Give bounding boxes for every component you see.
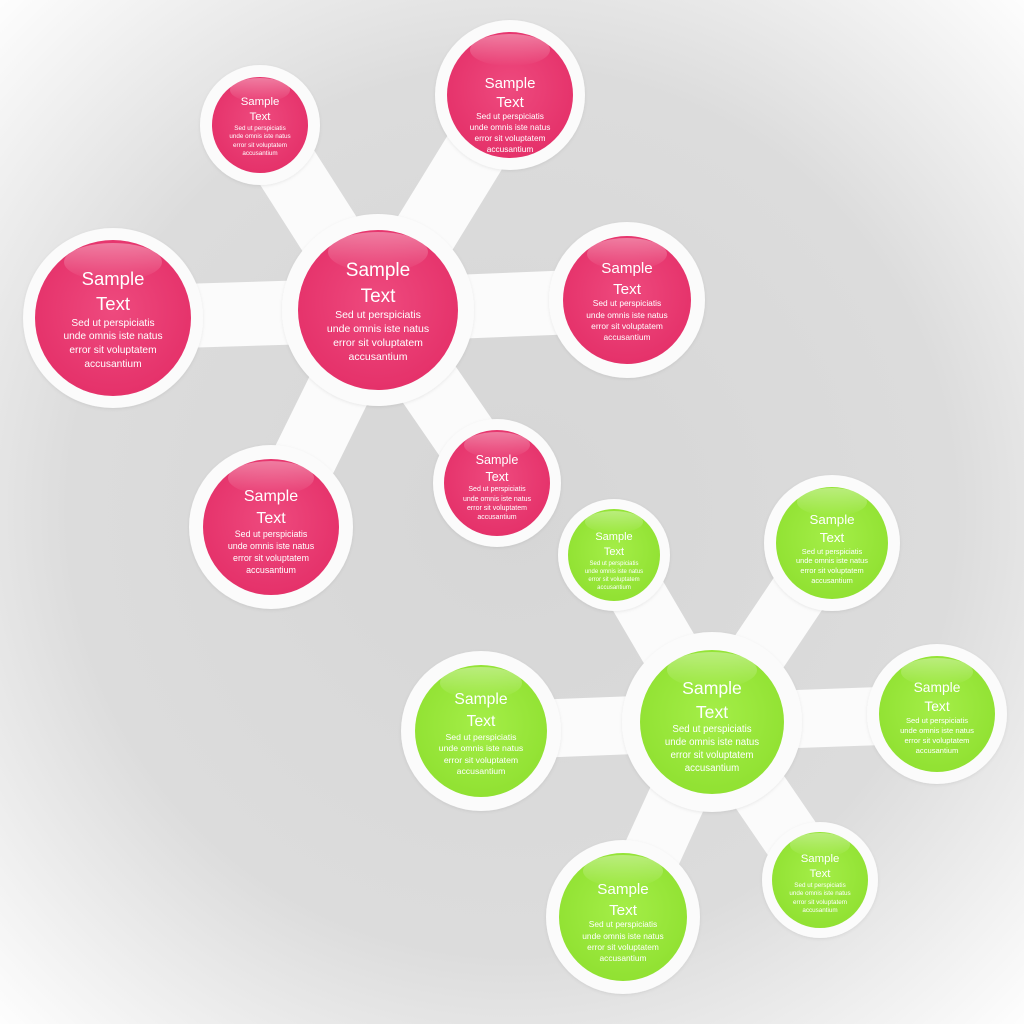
green node: right: Sample [914,680,961,695]
green node: top-right [776,487,888,599]
green node: top-right: Sed ut perspiciatis [802,547,862,556]
green node: top-right: error sit voluptatem [800,566,864,575]
pink node: center: Sed ut perspiciatis [335,309,421,321]
green node: center: Text [696,702,728,722]
pink rings [23,20,705,609]
green node: top-right: unde omnis iste natus [796,556,868,565]
pink node: bottom-right: error sit voluptatem [467,505,527,512]
green node: top-left: error sit voluptatem [588,577,640,583]
pink node: center: Sample [346,260,410,281]
green node: right [879,656,995,772]
green node: left: Text [467,713,496,730]
green node: bottom-right: Sample [801,853,839,865]
pink node: top: Sample [485,75,535,92]
green node: bottom-left [559,853,687,981]
pink node: top: Sed ut perspiciatis [476,111,544,121]
pink node: bottom-left: Sed ut perspiciatis [235,529,308,539]
green rings [401,475,1007,994]
pink node: top-left: Sed ut perspiciatis [234,125,286,132]
green node: bottom-right: unde omnis iste natus [789,890,851,897]
pink node: left: error sit voluptatem [69,345,157,356]
pink node: right: Text [613,281,642,298]
green node: right: error sit voluptatem [904,736,970,745]
green node: center: unde omnis iste natus [665,737,759,748]
green node: bottom-right: Sed ut perspiciatis [794,882,846,889]
pink node: center: unde omnis iste natus [327,323,429,335]
pink node: right [563,236,691,364]
green node: right: Text [924,699,950,714]
green network [401,475,1007,994]
green node: left: error sit voluptatem [444,755,518,765]
green node: center: error sit voluptatem [671,750,753,761]
green node: bottom-right: Text [810,868,831,880]
pink network [23,20,705,609]
green node: left: unde omnis iste natus [439,743,524,753]
green node: center: Sed ut perspiciatis [672,724,752,735]
pink node: bottom-left: unde omnis iste natus [228,541,315,551]
pink node: bottom-right [444,430,550,536]
green node: left: accusantium [457,766,505,776]
green connectors [481,543,937,917]
pink node: bottom-right: Sed ut perspiciatis [468,486,526,493]
pink node: top-left: error sit voluptatem [233,142,287,149]
green node: top-left: Text [604,546,624,558]
pink node: left: Sample [82,268,144,289]
pink node: bottom-right: Text [485,470,509,484]
green node: right: accusantium [916,746,958,755]
green node: bottom-right: accusantium [802,907,838,914]
pink node: left: Text [96,293,130,314]
green node: left: Sample [454,691,508,708]
pink node: bottom-left: Text [256,510,286,527]
green node: top-right: Sample [809,512,855,527]
pink node: right: Sed ut perspiciatis [593,298,661,308]
green node: right: unde omnis iste natus [900,726,974,735]
pink node: left: Sed ut perspiciatis [71,318,155,329]
pink node: bottom-left: error sit voluptatem [233,553,309,563]
pink node: bottom-left: accusantium [246,565,296,575]
pink node: left: accusantium [84,359,142,370]
pink node: right: accusantium [603,332,651,342]
green node: bottom-left: Sample [597,881,649,898]
pink node: left [35,240,191,396]
pink node: top: accusantium [487,144,533,154]
pink node: top: error sit voluptatem [474,133,546,143]
pink node: right: Sample [601,260,653,277]
pink node: bottom-right: Sample [476,453,518,467]
pink node: bottom-left: Sample [244,488,298,505]
green node: top-right: Text [820,530,844,545]
green node: top-left [568,509,660,601]
green node: center: accusantium [685,763,739,774]
pink node: top [447,32,573,158]
pink connectors [113,95,627,527]
green node: right: Sed ut perspiciatis [906,716,968,725]
pink node: top-left: Sample [241,96,279,108]
pink node: top-left: accusantium [242,150,278,157]
green node: bottom-right: error sit voluptatem [793,899,847,906]
green node: bottom-left: Text [609,902,638,919]
green node: top-left: accusantium [597,585,631,591]
pink node: right: error sit voluptatem [591,321,663,331]
green node: top-left: unde omnis iste natus [585,569,643,575]
green node: top-right: accusantium [811,576,853,585]
pink node: top-left: Text [250,111,271,123]
pink node: bottom-right: accusantium [477,514,517,521]
green node: left [415,665,547,797]
green node: bottom-left: accusantium [599,953,647,963]
green node: bottom-right [772,832,868,928]
green node: top-left: Sed ut perspiciatis [589,561,639,567]
pink node: left: unde omnis iste natus [63,331,163,342]
pink node: bottom-left [203,459,339,595]
green node: left: Sed ut perspiciatis [446,732,517,742]
green node: bottom-left: Sed ut perspiciatis [589,919,657,929]
pink node: right: unde omnis iste natus [586,310,668,320]
green node: center: Sample [682,678,742,698]
green node: center [640,650,784,794]
pink node: center [298,230,458,390]
pink node: center: error sit voluptatem [333,337,423,349]
pink node: top-left: unde omnis iste natus [229,133,291,140]
pink node: center: Text [361,286,396,307]
pink node: top: unde omnis iste natus [470,122,550,132]
pink node: bottom-right: unde omnis iste natus [463,496,532,503]
pink node: center: accusantium [349,351,408,363]
pink node: top-left [212,77,308,173]
green node: bottom-left: error sit voluptatem [587,942,659,952]
pink node: top: Text [496,94,525,111]
green node: top-left: Sample [595,531,633,543]
green node: bottom-left: unde omnis iste natus [582,931,664,941]
